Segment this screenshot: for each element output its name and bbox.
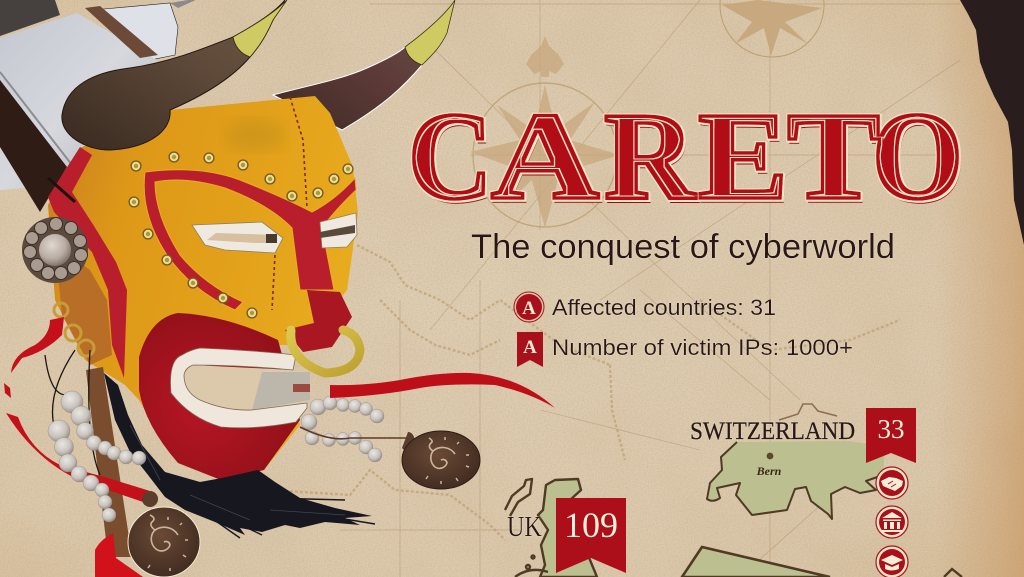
title: O bbox=[872, 88, 963, 226]
right red ribbon bbox=[330, 373, 555, 408]
title bbox=[408, 87, 963, 226]
nose ring bbox=[291, 330, 360, 373]
label: Switzerland: SWITZERLAND bbox=[690, 417, 855, 445]
map: France bbox=[682, 547, 830, 577]
ribbon: UK 109: 109 bbox=[564, 505, 618, 545]
strap loop bbox=[48, 178, 75, 202]
torn dark edge bbox=[960, 0, 1024, 245]
Ireland coast bbox=[505, 479, 532, 516]
stat: victim IPs: Number of victim IPs: 1000+ bbox=[552, 335, 853, 360]
stat: affected countries bbox=[514, 292, 776, 322]
left red ribbons bbox=[4, 317, 150, 503]
icon: round A badge bbox=[514, 292, 544, 322]
icon: bank bbox=[876, 506, 908, 538]
red nose bbox=[285, 290, 352, 352]
icon: round A badge: A bbox=[522, 298, 536, 319]
left eye bbox=[192, 222, 283, 253]
title: R bbox=[604, 87, 696, 226]
ribbon: Switzerland 33: 33 bbox=[878, 414, 904, 444]
map: UK bbox=[505, 479, 597, 577]
right eye bbox=[320, 213, 357, 248]
beard bbox=[104, 373, 375, 538]
compass rose bbox=[470, 36, 620, 228]
label: UK: UK bbox=[507, 511, 542, 542]
stat: victim IPs bbox=[517, 332, 853, 367]
red cheek band bbox=[48, 147, 127, 378]
cheek brown side piece bbox=[55, 245, 112, 365]
right horn bbox=[273, 0, 455, 130]
compass star top bbox=[720, 0, 824, 57]
map coastlines bbox=[270, 245, 900, 540]
red Y-shaped face stripe bbox=[144, 170, 356, 310]
title: C bbox=[408, 88, 492, 226]
icon: ribbon A badge bbox=[517, 332, 543, 367]
ear rosette bbox=[22, 217, 88, 283]
red mouth section bbox=[139, 313, 300, 480]
left horn bbox=[62, 0, 287, 150]
title: T bbox=[787, 87, 880, 225]
stat: affected countries: Affected countries: 31 bbox=[552, 295, 776, 320]
subtitle: The conquest of cyberworld bbox=[471, 228, 895, 266]
pole bbox=[86, 367, 132, 557]
icon: graduation cap bbox=[876, 546, 908, 577]
ribbon: Switzerland 33 bbox=[866, 408, 916, 463]
Bern capital marker bbox=[767, 453, 773, 459]
Great Britain bbox=[538, 479, 597, 577]
left bead strands bbox=[48, 391, 146, 522]
helmet back panels bbox=[0, 0, 200, 212]
red cloth bbox=[95, 533, 143, 577]
ribbon: UK 109 bbox=[556, 498, 626, 573]
left pendant bbox=[128, 491, 200, 577]
rivets bbox=[128, 151, 354, 319]
leather shading bbox=[225, 119, 285, 151]
icon: handshake bbox=[876, 467, 908, 499]
right pendant bbox=[300, 427, 480, 489]
yellow leather mask body bbox=[48, 96, 358, 480]
faint map grid lines bbox=[340, 0, 960, 577]
left cords bbox=[45, 350, 100, 475]
mask illustration bbox=[0, 0, 555, 577]
gold earrings bbox=[54, 303, 94, 356]
mouth frame bbox=[170, 348, 310, 428]
map: Switzerland bbox=[707, 404, 885, 519]
right bead strands bbox=[301, 396, 384, 462]
title: E bbox=[698, 88, 788, 226]
map: Switzerland: Bern bbox=[756, 464, 782, 478]
stitching bbox=[272, 97, 307, 310]
title: A bbox=[491, 87, 599, 225]
map: bottom right coast bbox=[944, 569, 962, 577]
icon: ribbon A badge: A bbox=[523, 337, 537, 358]
